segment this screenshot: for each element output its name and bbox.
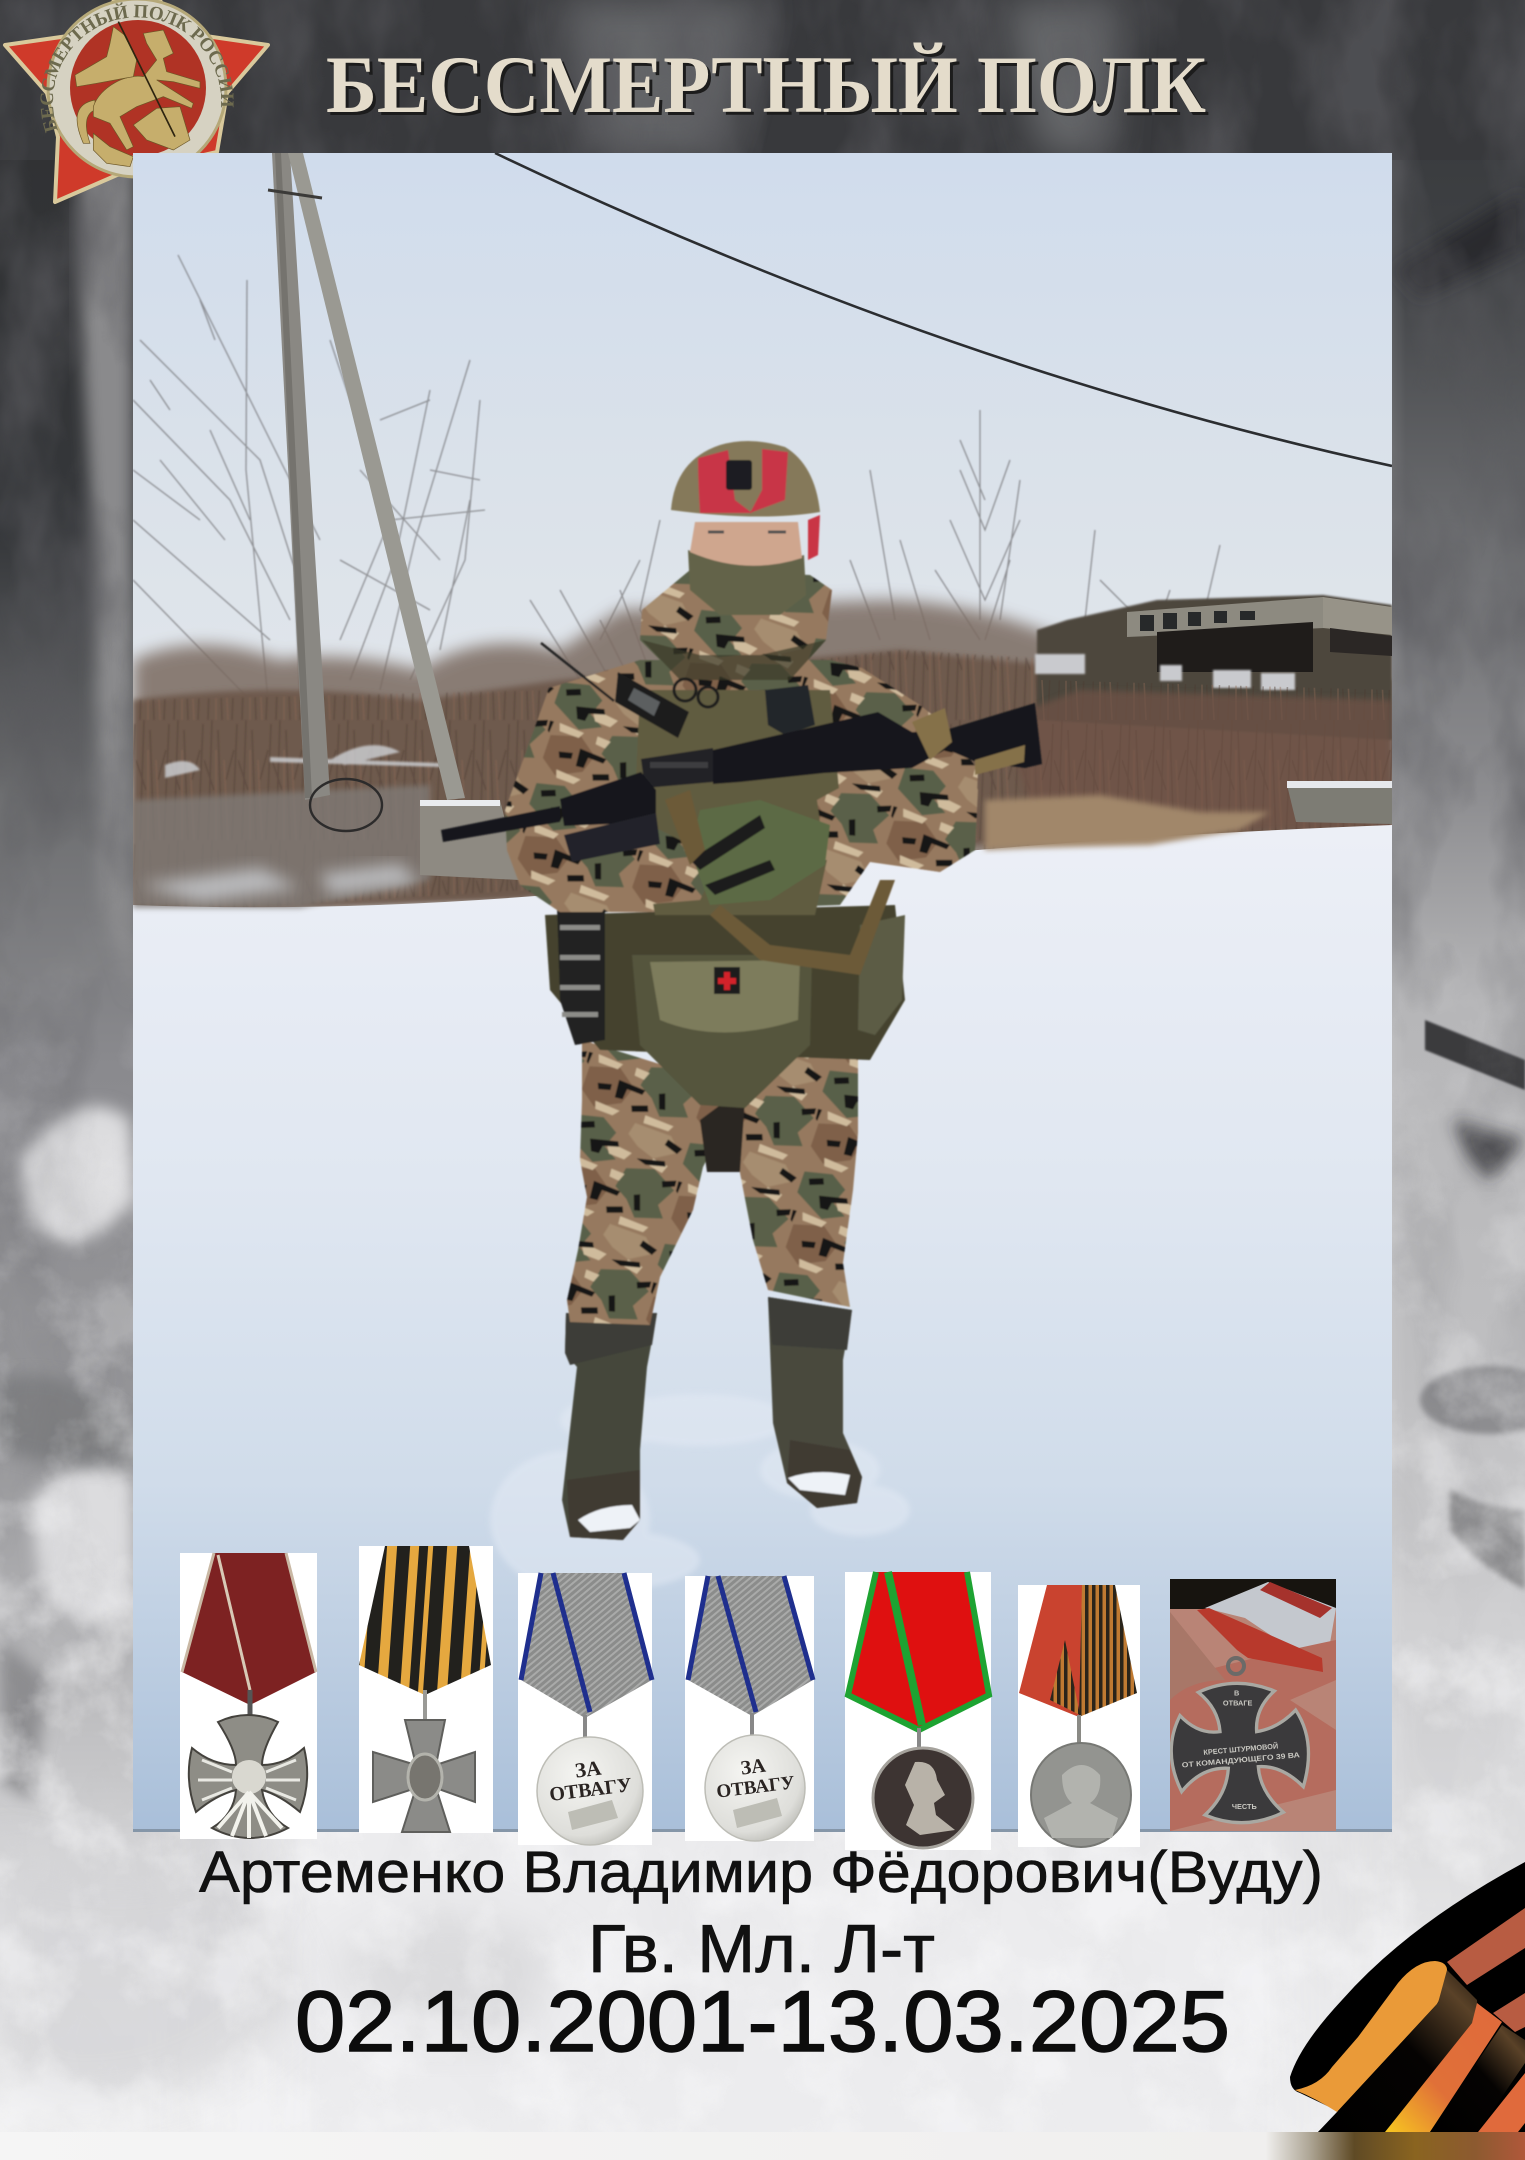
- photo: soldier in winter field: [133, 153, 1392, 1832]
- medal lettering: ОТВАГУ: [715, 1772, 796, 1803]
- bust: [1044, 1765, 1118, 1838]
- sling tab: [912, 708, 1025, 775]
- snow footprints: [490, 1394, 910, 1590]
- medal disc: [537, 1737, 643, 1845]
- boot toes: [567, 1440, 862, 1540]
- soldier: [441, 441, 1042, 1540]
- cross lettering: ОТВАГЕ: [1223, 1699, 1252, 1708]
- boot soles snow: [578, 1472, 850, 1532]
- medal lettering: ЗА: [739, 1755, 767, 1780]
- badge: star emblem: [2, 0, 270, 204]
- snow patches in bushes: [165, 745, 440, 778]
- right trouser leg: [730, 1040, 858, 1307]
- St George ribbon: [1290, 1862, 1525, 2132]
- medal 7: assault cross in hand: [1170, 1579, 1336, 1831]
- medal lettering: ОТВАГУ: [548, 1774, 633, 1806]
- cross: [189, 1715, 307, 1838]
- medal 2: Cross of St George: [359, 1546, 493, 1833]
- medal 4: For Courage: [685, 1576, 814, 1841]
- medal lettering: [713, 1751, 796, 1803]
- bush band: [133, 650, 1392, 915]
- ribbon: [688, 1576, 813, 1716]
- medal disc: [1031, 1743, 1131, 1847]
- left forearm: [507, 800, 720, 912]
- crotch: [700, 1100, 745, 1172]
- bust: [905, 1762, 955, 1835]
- cross lettering: ЧЕСТЬ: [1232, 1802, 1257, 1811]
- ribbon: [359, 1546, 491, 1695]
- orange fold: [1295, 1961, 1447, 2112]
- medal lettering: ЗА: [574, 1756, 603, 1783]
- medal disc: [873, 1748, 973, 1848]
- ring: [248, 1690, 252, 1725]
- compass box: [765, 685, 815, 735]
- shoulder strap: [665, 790, 895, 975]
- cross lettering: [1181, 1689, 1301, 1811]
- dry grass: [985, 795, 1270, 850]
- medal lettering: [545, 1752, 633, 1806]
- text: name: Артеменко Владимир Фёдорович(Вуду): [199, 1840, 1323, 1905]
- red centre: [70, 20, 206, 156]
- ring lettering: БЕССМЕРТНЫЙ ПОЛК РОССИИ: [40, 2, 234, 134]
- sky: [133, 153, 1392, 913]
- ribbon: [1197, 1608, 1323, 1672]
- ribbon: [182, 1553, 316, 1705]
- lower vest belt: [545, 905, 905, 1060]
- bare trees: [133, 255, 1220, 700]
- medal 5: Suvorov: [845, 1572, 991, 1850]
- St George rider: [75, 22, 200, 167]
- dump pouch: [632, 955, 812, 1108]
- medal 6: Zhukov: [1018, 1585, 1140, 1847]
- gloves: [690, 800, 830, 905]
- title: БЕССМЕРТНЫЙ ПОЛК: [329, 42, 1209, 133]
- ammo pouch: [557, 907, 605, 1045]
- text: life dates: 02.10.2001-13.03.2025: [295, 1974, 1230, 2070]
- concrete base: [420, 800, 520, 880]
- boot cuffs: [565, 1297, 852, 1365]
- bush band haze: [133, 600, 1392, 915]
- orange-red band lower: [1478, 2073, 1525, 2132]
- black band: [1290, 1862, 1525, 2132]
- right boot: [768, 1297, 862, 1508]
- face mask: [688, 550, 806, 615]
- left trouser leg: [567, 1040, 727, 1325]
- face: [690, 522, 802, 566]
- jacket silhouette: [505, 660, 978, 912]
- rifle: [441, 703, 1042, 862]
- snow ground: [133, 825, 1392, 1832]
- cross: [373, 1720, 475, 1832]
- text: rank: Гв. Мл. Л-т: [588, 1911, 935, 1987]
- abandoned building: [1000, 595, 1392, 830]
- concrete block right: [1288, 788, 1392, 824]
- red stripe second: [1493, 1993, 1525, 2032]
- medal backing ground line: [133, 1829, 1392, 1832]
- ribbon: [521, 1573, 652, 1718]
- bottom strip: [0, 2132, 1525, 2160]
- star shape: [5, 0, 268, 202]
- collar scarf: [640, 570, 832, 680]
- utility pole: [268, 153, 465, 800]
- cross lettering: В: [1234, 1689, 1239, 1698]
- right forearm: [817, 750, 978, 872]
- medal 3: For Courage: [518, 1573, 652, 1845]
- medkit patch: [714, 967, 740, 994]
- helmet: [671, 441, 820, 560]
- cross lettering: ОТ КОМАНДУЮЩЕГО 39 ВА: [1181, 1750, 1301, 1769]
- ribbon: [1019, 1585, 1082, 1717]
- orange-red band: [1385, 2003, 1502, 2132]
- dark band two: [1430, 2025, 1525, 2132]
- ribbon: [848, 1572, 989, 1730]
- red stripe upper: [1447, 1908, 1525, 1985]
- cross: [1171, 1683, 1308, 1823]
- title: БЕССМЕРТНЫЙ ПОЛК: [326, 39, 1206, 130]
- wire coil: [310, 779, 382, 831]
- medal 1: Order of Courage: [180, 1553, 317, 1839]
- medal disc: [705, 1735, 805, 1841]
- low bushes over snow: [133, 785, 430, 908]
- vest front: [635, 690, 840, 915]
- cross lettering: КРЕСТ ШТУРМОВОЙ: [1203, 1741, 1279, 1757]
- ring: [48, 0, 226, 177]
- dark fold band: [1318, 1970, 1477, 2132]
- left boot: [562, 1313, 657, 1540]
- scissors and radio: [541, 643, 718, 738]
- power line: [495, 153, 1392, 466]
- side pouch: [858, 915, 905, 1035]
